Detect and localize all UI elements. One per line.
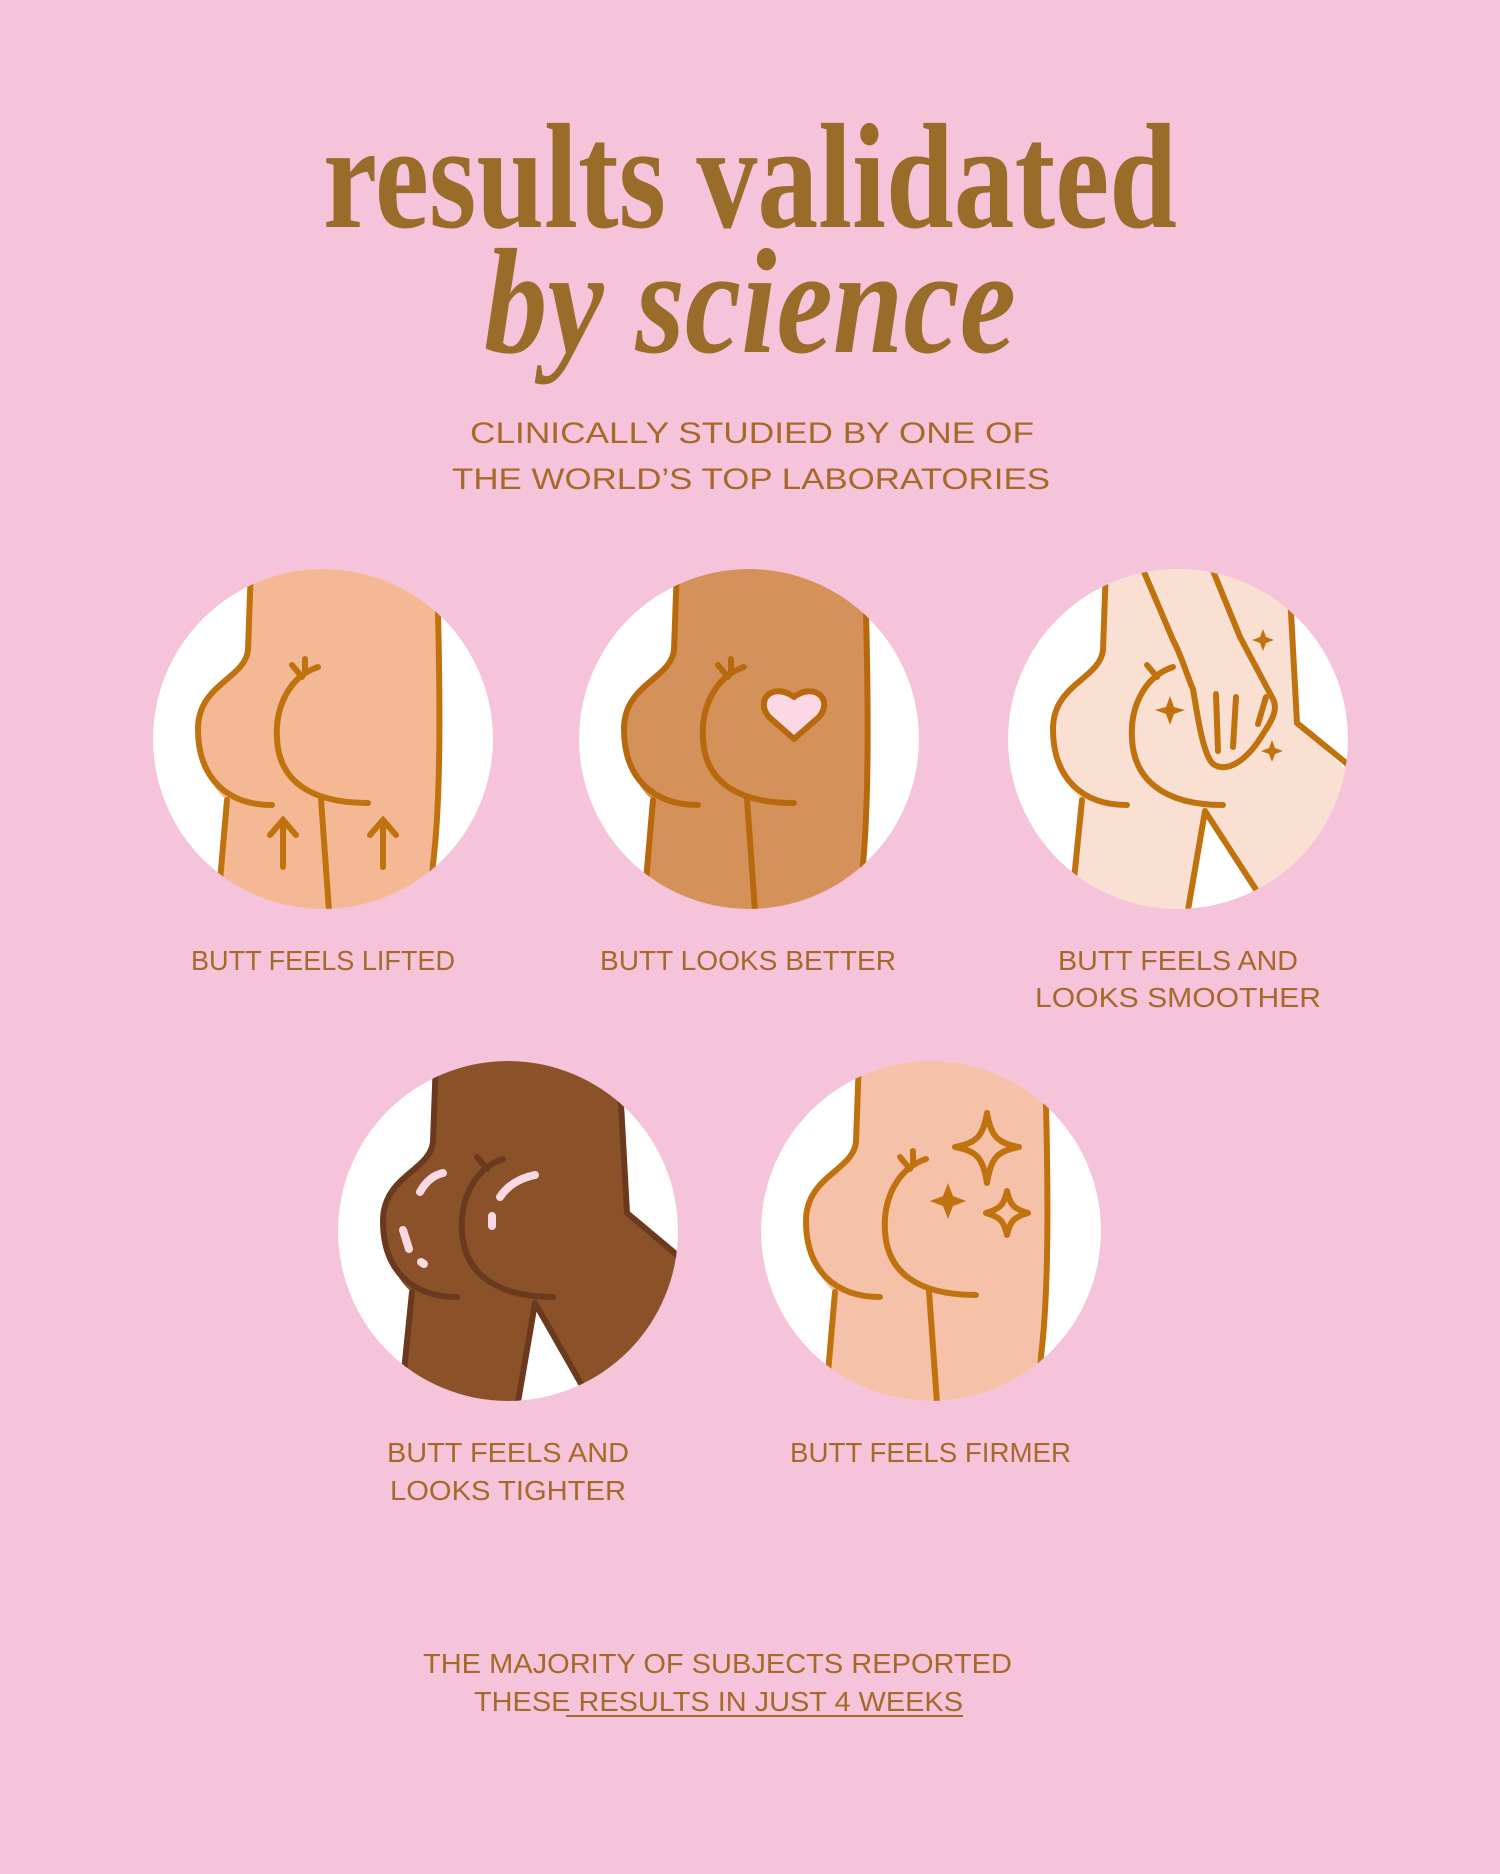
label: tighter: [387, 1437, 629, 1506]
icon: firmer: [761, 1061, 1101, 1401]
title: by science: [484, 219, 1016, 385]
icon: tighter: [338, 1061, 678, 1401]
footer note: THE MAJORITY OF SUBJECTS REPORTED: [423, 1648, 1012, 1679]
label: tighter: LOOKS TIGHTER: [390, 1475, 626, 1506]
label: looks better: BUTT LOOKS BETTER: [600, 945, 896, 976]
footer note: [423, 1648, 1012, 1717]
label: firmer: BUTT FEELS FIRMER: [790, 1437, 1071, 1468]
title: [323, 94, 1177, 385]
label: smoother: [1035, 945, 1321, 1013]
footer note: THESE RESULTS IN JUST 4 WEEKS: [474, 1686, 963, 1717]
title: results validated: [323, 94, 1177, 260]
icon: smoother: [1008, 569, 1348, 909]
label: lifted: BUTT FEELS LIFTED: [191, 945, 455, 976]
subtitle: THE WORLD’S TOP LABORATORIES: [452, 463, 1050, 496]
label: smoother: LOOKS SMOOTHER: [1035, 982, 1321, 1013]
subtitle: CLINICALLY STUDIED BY ONE OF: [470, 417, 1034, 450]
label: smoother: BUTT FEELS AND: [1058, 945, 1298, 976]
icon: looks better: [579, 569, 919, 909]
subtitle: [452, 417, 1050, 496]
label: tighter: BUTT FEELS AND: [387, 1437, 629, 1468]
icon: lifted: [153, 569, 493, 909]
